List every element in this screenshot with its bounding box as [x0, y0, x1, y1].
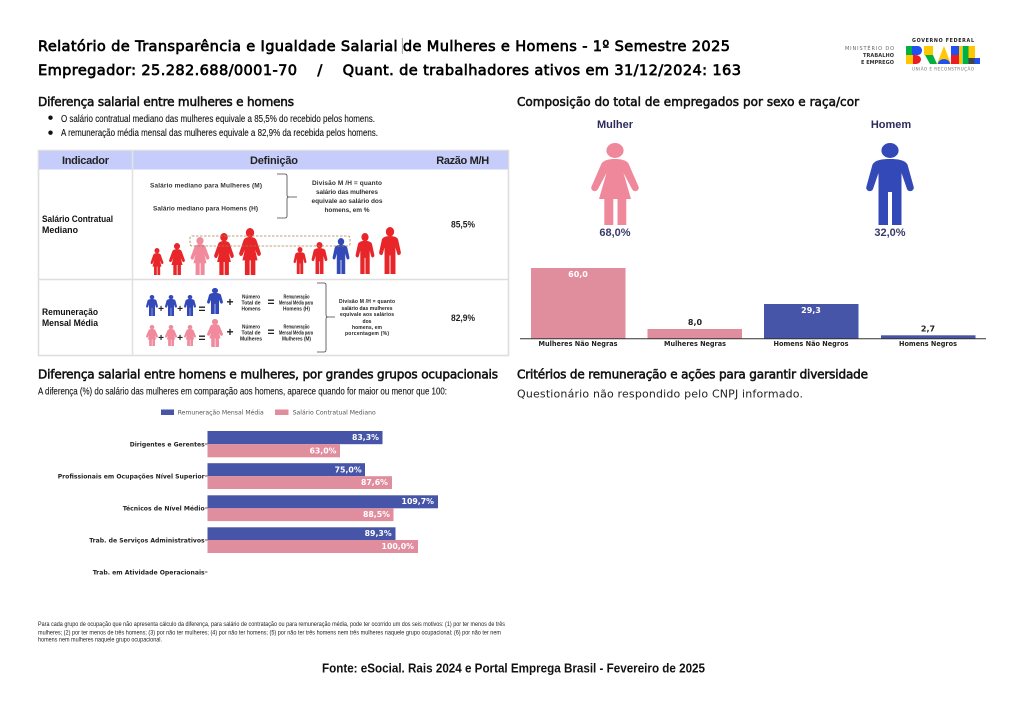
source line: Fonte: eSocial. Rais 2024 e Portal Emprega Brasil - Fevereiro de 2025	[322, 660, 705, 676]
value: 85,5%: 85,5%	[451, 220, 475, 231]
definition: average pay, women: =	[198, 331, 206, 345]
bar chart: occupational groups	[58, 431, 438, 576]
bar chart: occupational groups: 109,7%	[402, 497, 434, 506]
table header: Razão M/H	[436, 155, 489, 167]
definition: average pay ratio: equivale aos salários	[340, 312, 394, 318]
heading: composition: Composição do total de empregados por sexo e raça/cor	[517, 95, 859, 109]
bar chart: composition by sex and race: 60,0	[568, 270, 588, 279]
definition text: median salary: Salário mediano para Mulheres (M)	[150, 182, 262, 190]
pictogram: women and men ordered by salary	[151, 228, 400, 275]
logo: ministry and Governo Federal: MINISTÉRIO DO	[845, 44, 894, 52]
row label: Salário Contratual Mediano: Mediano	[42, 225, 78, 236]
bar chart: composition by sex and race: Homens Não Negros	[774, 340, 848, 348]
bar chart: occupational groups: Profissionais em Ocupações Nível Superior	[58, 472, 205, 480]
bar chart: occupational groups: 89,3%	[365, 529, 392, 538]
chart legend	[161, 408, 376, 416]
bar chart: occupational groups: 87,6%	[361, 478, 388, 487]
definition: average pay ratio: salário das mulheres	[342, 306, 393, 312]
icon: woman 68,0%	[591, 119, 639, 239]
logo: ministry and Governo Federal: E EMPREGO	[861, 60, 894, 66]
chart subtitle: A diferença (%) do salário das mulheres em comparação aos homens, aparece quando for maior ou menor que 100:	[38, 386, 447, 397]
icon: man 32,0%: Homem	[871, 119, 911, 131]
title	[38, 38, 741, 79]
logo: ministry and Governo Federal: UNIÃO E RECONSTRUÇÃO	[912, 66, 975, 72]
bar chart: occupational groups: 83,3%	[352, 433, 379, 442]
bar chart: composition by sex and race: Mulheres Negras	[664, 340, 726, 348]
title: Relatório de Transparência e Igualdade Salarial de Mulheres e Homens - 1º Semestre 2025	[38, 38, 730, 55]
bar chart: occupational groups: 88,5%	[363, 510, 390, 519]
definition: average pay, men: +	[226, 295, 234, 309]
definition text: median salary: Divisão M /H = quanto	[312, 180, 382, 187]
definition: average pay, women: Remuneração	[284, 324, 310, 330]
definition: average pay, men: Número	[242, 294, 260, 300]
heading: occupational groups: Diferença salarial entre homens e mulheres, por grandes grupos ocupacionais	[38, 367, 498, 381]
row label: Remuneração Mensal Média	[42, 307, 99, 329]
logo: ministry and Governo Federal: TRABALHO	[863, 53, 894, 59]
definition: average pay, women: Total de	[242, 330, 261, 336]
definition: average pay ratio	[317, 283, 395, 352]
bar chart: composition by sex and race: 2,7	[921, 324, 935, 334]
definition: average pay, men: Homens	[242, 306, 261, 312]
definition: average pay ratio: dos	[363, 319, 372, 325]
definition text: median salary: Salário mediano para Homens (H)	[153, 206, 258, 212]
footnote: mulheres; (2) por ter menos de três homens; (3) por não ter mulheres; (4) por não ter homens; (5) por não ter três homens nem três mulheres naquele grupo ocupacional; (6) por não ter nem	[38, 629, 501, 636]
table header: Definição	[250, 155, 298, 167]
footnote: Para cada grupo de ocupação que não apresenta cálculo da diferença, para salário de contratação ou para remuneração média, pode ter ocorrido um dos seis motivos: (1) por ter menos de três	[38, 621, 505, 628]
icon: woman 68,0%: Mulher	[597, 119, 634, 131]
table header	[62, 155, 489, 167]
row label: Salário Contratual Mediano	[42, 214, 113, 236]
bar chart: occupational groups: Trab. de Serviços Administrativos	[89, 536, 205, 544]
bar chart: occupational groups: Trab. em Atividade Operacionais	[93, 568, 205, 576]
definition text: median salary: salário das mulheres	[316, 189, 378, 196]
definition: average pay, men	[146, 288, 313, 316]
bar chart: composition by sex and race	[520, 268, 986, 348]
definition: average pay, men: Remuneração	[284, 294, 310, 300]
definition: average pay, women: +	[226, 325, 234, 339]
definition: average pay, women	[146, 319, 313, 347]
definition: average pay, men: Mensal Média para	[279, 300, 313, 306]
definition: average pay, women: =	[267, 325, 275, 339]
definition: average pay ratio: porcentagem (%)	[345, 331, 389, 337]
table header: Indicador	[62, 155, 110, 167]
row label: Remuneração Mensal Média: Remuneração	[42, 307, 98, 318]
bar chart: composition by sex and race: Homens Negros	[899, 340, 957, 348]
bar chart: occupational groups: Dirigentes e Gerentes	[130, 440, 205, 448]
bar chart: occupational groups: 75,0%	[335, 465, 362, 474]
definition text: median salary: homens, em %	[324, 207, 370, 214]
title: Empregador: 25.282.688/0001-70 / Quant. de trabalhadores ativos em 31/12/2024: 163	[38, 62, 741, 79]
icon: man 32,0%	[866, 119, 914, 239]
bar chart: composition by sex and race: Mulheres Não Negras	[538, 340, 618, 348]
definition: average pay, women: +	[158, 333, 164, 344]
bullet list	[48, 114, 378, 139]
chart legend: Salário Contratual Mediano	[293, 408, 376, 416]
definition: average pay, women: Mulheres (M)	[282, 336, 311, 342]
chart legend: Remuneração Mensal Média	[178, 408, 264, 416]
definition: average pay, men: +	[158, 304, 164, 315]
bullet list: O salário contratual mediano das mulheres equivale a 85,5% do recebido pelos homens.	[61, 114, 375, 125]
bar chart: occupational groups: 63,0%	[309, 446, 337, 455]
heading: criteria: Critérios de remuneração e ações para garantir diversidade	[517, 367, 868, 381]
footnote	[38, 621, 505, 644]
criteria text: Questionário não respondido pelo CNPJ informado.	[517, 388, 803, 401]
logo: ministry and Governo Federal	[845, 38, 980, 72]
definition: average pay ratio: homens, em	[352, 325, 383, 331]
definition: average pay, women: Número	[242, 324, 260, 330]
icon: woman 68,0%: 68,0%	[599, 227, 631, 239]
bar chart: composition by sex and race: 8,0	[688, 318, 703, 327]
definition: average pay, men: =	[267, 295, 275, 309]
definition: average pay, women: +	[177, 333, 183, 344]
definition text: median salary: equivale ao salário dos	[312, 198, 383, 205]
icon: man 32,0%: 32,0%	[874, 227, 906, 239]
definition: average pay, men: Homens (H)	[283, 306, 310, 312]
definition text: median salary	[150, 174, 383, 218]
panel: indicator table	[38, 150, 509, 356]
value: 82,9%: 82,9%	[451, 313, 475, 324]
definition: average pay ratio: Divisão M /H = quanto	[339, 299, 395, 305]
row label: Salário Contratual Mediano: Salário Contratual	[42, 214, 113, 225]
bullet list: A remuneração média mensal das mulheres equivale a 82,9% da recebida pelos homens.	[61, 128, 378, 139]
definition: average pay, men: Total de	[242, 300, 261, 306]
footnote: homens nem mulheres naquele grupo ocupacional.	[38, 636, 162, 644]
bar chart: occupational groups: 100,0%	[382, 542, 414, 551]
definition: average pay, women: Mulheres	[240, 336, 262, 342]
row label: Remuneração Mensal Média: Mensal Média	[42, 318, 99, 329]
definition: average pay, men: =	[198, 302, 206, 316]
bar chart: occupational groups: Técnicos de Nível Médio	[123, 504, 205, 512]
heading: salary gap: Diferença salarial entre mulheres e homens	[38, 95, 294, 109]
logo: ministry and Governo Federal: GOVERNO FEDERAL	[912, 38, 974, 44]
bar chart: composition by sex and race: 29,3	[801, 306, 821, 315]
definition: average pay, women: Mensal Média para	[279, 330, 313, 336]
definition: average pay, men: +	[177, 304, 183, 315]
